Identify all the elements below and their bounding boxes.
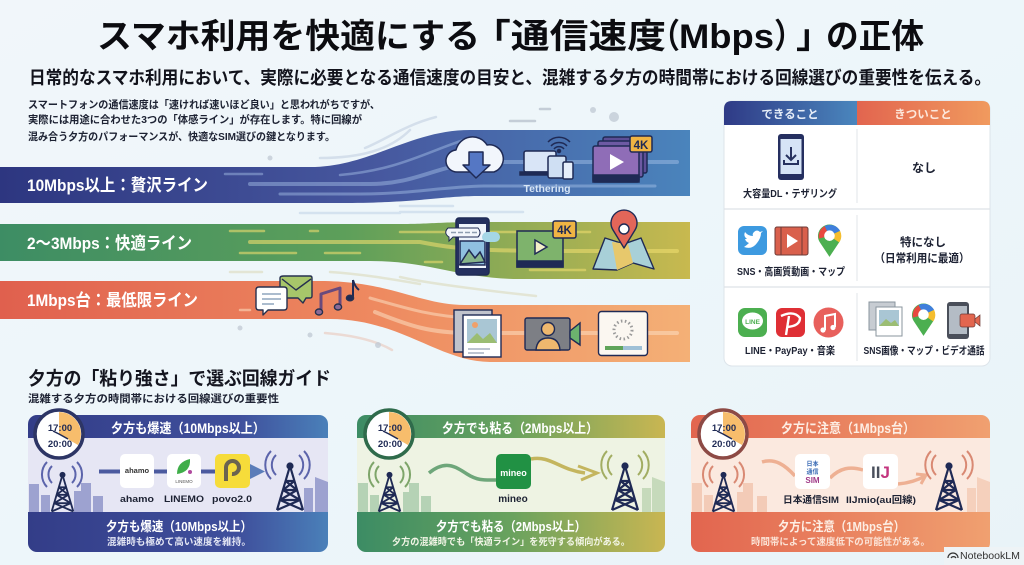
icon: phone with photo and chat	[446, 218, 500, 275]
speed bands	[0, 107, 690, 362]
table header: can do	[724, 101, 857, 125]
card 3 labels	[783, 494, 916, 506]
card 1 tower right	[265, 451, 310, 510]
icon: video call	[525, 318, 580, 350]
card 2 footer text: 夕方の混雑時でも「快適ライン」を死守する傾向がある。	[392, 536, 630, 548]
title: Mbps	[679, 18, 774, 56]
card 1 header: 夕方も爆速（10Mbps以上）	[111, 420, 265, 436]
title: （	[650, 18, 680, 56]
logo: ahamo	[120, 454, 154, 488]
logo: IIJ: IIJ	[871, 463, 890, 482]
card 3 tower left	[703, 462, 744, 512]
logo: povo	[215, 454, 250, 488]
icon: photo stack	[454, 310, 501, 357]
icon: film player	[775, 227, 808, 255]
card 1 skyline right	[304, 477, 328, 512]
icon: PayPay	[776, 308, 805, 337]
row 2 left label: SNS・高画質動画・マップ	[737, 265, 845, 278]
row 1 left label: 大容量DL・テザリング	[743, 187, 837, 200]
caption: Tethering: Tethering	[523, 183, 571, 195]
NotebookLM badge: NotebookLM	[960, 551, 1020, 562]
card 3 wave	[762, 461, 926, 484]
section heading: 夕方の「粘り強さ」で選ぶ回線ガイド	[28, 368, 331, 389]
card 1 footer title: 夕方も爆速（10Mbps以上）	[106, 519, 252, 534]
card 1 labels	[120, 494, 252, 505]
clock: 20:00	[378, 439, 402, 450]
icon: 4K video player	[517, 221, 576, 267]
card 2 wave	[429, 458, 597, 480]
band: 1Mbps	[0, 281, 690, 362]
panel: caution lines	[691, 410, 990, 552]
title: 」	[796, 18, 832, 56]
icon: phone download	[778, 134, 804, 180]
card 1 labels: ahamo	[120, 494, 154, 505]
section subheading: 混雑する夕方の時間帯における回線選びの重要性	[28, 392, 280, 405]
card 1 skyline left	[29, 483, 103, 512]
card 2 footer title: 夕方でも粘る（2Mbps以上）	[436, 519, 586, 534]
card 3 labels: IIJmio(au回線)	[846, 494, 916, 506]
row 2 right label	[874, 235, 970, 265]
logo: Nihon Tsushin SIM	[795, 454, 830, 489]
badge: 4K: 4K	[634, 140, 649, 152]
title: の正体	[826, 18, 924, 56]
panel: sticky line	[357, 410, 665, 552]
card 3 tower right	[925, 451, 973, 510]
card 3 skyline right	[967, 477, 990, 512]
row 3 left label: LINE・PayPay・音楽	[745, 344, 835, 357]
intro text block: 混み合う夕方のパフォーマンスが、快適なSIM選びの鍵となります。	[28, 130, 335, 143]
logo: Nihon Tsushin SIM: SIM	[805, 476, 820, 485]
badge: 4K: 4K	[557, 225, 573, 237]
card 2 skyline right	[642, 477, 665, 512]
icon: LINE: LINE	[745, 319, 761, 326]
clock: 17:00	[48, 423, 72, 434]
icon: chat bubbles and music	[256, 276, 359, 315]
clock	[365, 410, 413, 458]
card 3 header: 夕方に注意（1Mbps台）	[781, 420, 915, 436]
icon: Twitter	[738, 226, 767, 255]
logo: LINEMO	[167, 454, 201, 488]
card 2 label: mineo	[498, 494, 528, 505]
card 2 tower right	[601, 451, 649, 510]
card 1 labels: povo2.0	[212, 494, 252, 505]
floating dots	[238, 107, 619, 348]
icon: music	[814, 308, 844, 338]
motion streaks	[230, 109, 550, 350]
title: スマホ利用を快適にする	[97, 18, 480, 56]
card 1 labels: LINEMO	[164, 494, 204, 505]
icon: loading screen	[598, 312, 648, 356]
card 1 link arrow	[99, 464, 265, 479]
title	[97, 18, 924, 56]
logo: mineo: mineo	[500, 468, 527, 478]
icon: devices with wifi	[520, 137, 573, 179]
icon: photos	[869, 302, 902, 336]
card 1 footer text: 混雑時も極めて高い速度を維持。	[107, 536, 251, 548]
icon: map with pin	[593, 210, 654, 270]
intro text block	[28, 98, 380, 143]
card 3 footer text: 時間帯によって速度低下の可能性がある。	[751, 536, 930, 548]
icon: map pin	[818, 225, 841, 257]
band 3 label: 1Mbps台：最低限ライン	[27, 290, 198, 310]
row 1 right label: なし	[912, 161, 936, 175]
clock: 20:00	[48, 439, 72, 450]
logo: Nihon Tsushin SIM: 通信	[806, 468, 819, 476]
logo: mineo	[496, 454, 531, 489]
row 2 right label: （日常利用に最適）	[874, 251, 970, 265]
clock: 20:00	[712, 439, 736, 450]
logo: Nihon Tsushin SIM: 日本	[806, 460, 819, 468]
title: 「通信速度	[472, 18, 666, 56]
panel: capability table	[724, 101, 990, 366]
logo: LINEMO: LINEMO	[175, 479, 193, 484]
band: 10Mbps	[0, 130, 690, 203]
card 1 tower left	[42, 462, 82, 512]
table header: can do: できること	[761, 108, 819, 121]
row 2 right label: 特になし	[900, 235, 946, 249]
logo: IIJ	[863, 454, 898, 489]
band 1 label: 10Mbps以上：贅沢ライン	[27, 176, 208, 195]
table header: hard to do: きついこと	[894, 108, 952, 121]
title: ）	[774, 18, 804, 56]
band 2 label: 2～3Mbps：快適ライン	[27, 234, 192, 253]
band: 2-3Mbps	[0, 222, 690, 279]
icon: LINE	[738, 308, 767, 337]
clock	[35, 410, 83, 458]
card 2 header: 夕方でも粘る（2Mbps以上）	[442, 420, 598, 436]
row 3 right label: SNS画像・マップ・ビデオ通話	[864, 344, 985, 357]
NotebookLM badge	[944, 547, 1024, 565]
clock: 17:00	[712, 423, 736, 434]
icon: 4K video stack	[593, 136, 652, 182]
card 2 skyline left	[358, 483, 431, 512]
card 3 footer title: 夕方に注意（1Mbps台）	[778, 519, 905, 534]
icon: phone video call	[947, 302, 980, 339]
card 3 skyline left	[692, 483, 767, 512]
table header: hard to do	[857, 101, 990, 125]
clock	[699, 410, 747, 458]
clock: 17:00	[378, 423, 402, 434]
icon: map pin	[912, 304, 935, 336]
logo: ahamo: ahamo	[125, 466, 149, 475]
card 2 tower left	[369, 462, 410, 512]
panel: fast lines	[28, 410, 328, 552]
intro text block: 実際には用途に合わせた3つの「体感ライン」が存在します。特に回線が	[28, 113, 362, 126]
card 3 labels: 日本通信SIM	[783, 494, 839, 506]
icon: cloud download	[446, 137, 503, 178]
intro text block: スマートフォンの通信速度は「速ければ速いほど良い」と思われがちですが、	[28, 98, 380, 111]
